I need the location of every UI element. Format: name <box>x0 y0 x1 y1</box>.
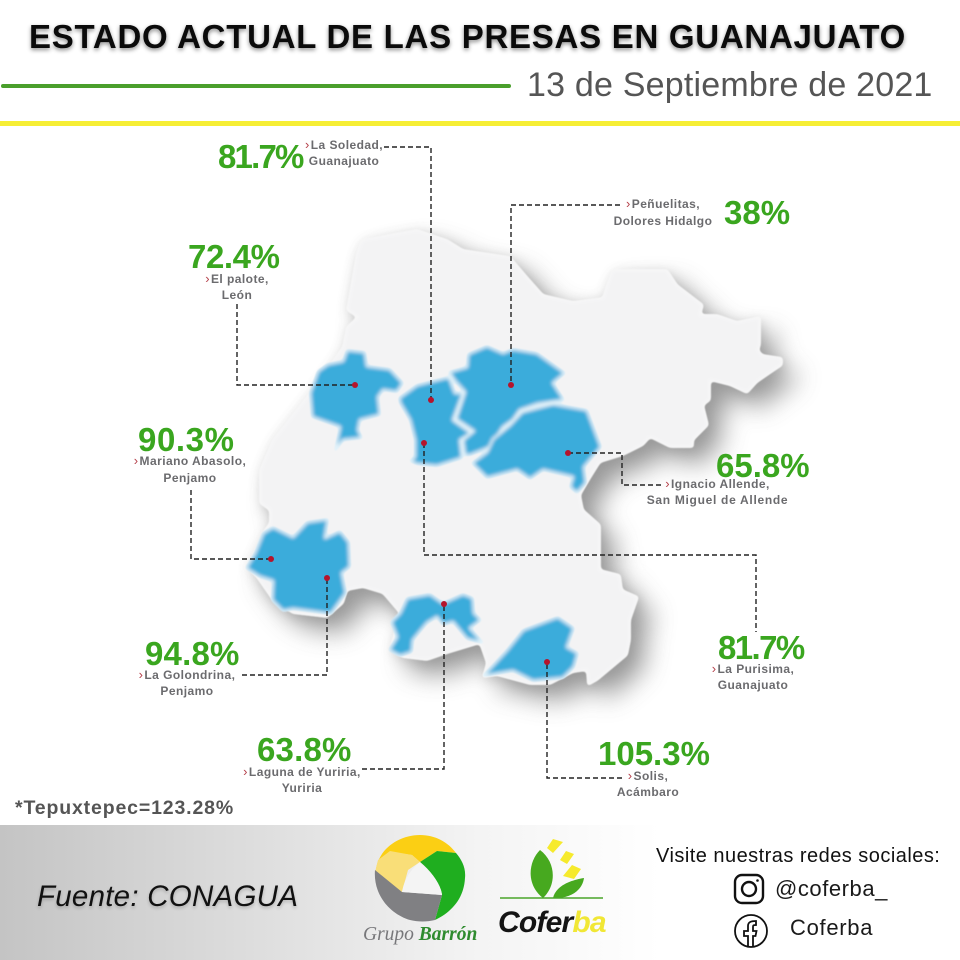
leaf tall <box>531 850 553 898</box>
label: La Purísima: Guanajuato <box>718 678 788 692</box>
label: Ignacio Allende: San Miguel de Allende <box>647 492 788 506</box>
municipalities <box>246 346 601 681</box>
wordmark: Coferba <box>498 906 606 939</box>
instagram handle: @coferba_ <box>775 876 888 901</box>
date subtitle: 13 de Septiembre de 2021 <box>527 66 933 104</box>
stat: Laguna de Yuriria: 63.8% <box>257 731 352 768</box>
label: Ignacio Allende <box>647 476 788 506</box>
note: Tepuxtepec: *Tepuxtepec=123.28% <box>15 797 234 819</box>
ground line <box>500 897 603 899</box>
region: Guanajuato <box>399 377 471 466</box>
label: Mariano Abasolo: Penjamo <box>163 471 217 485</box>
label: El palote: ›El palote, <box>205 271 269 286</box>
label: Peñuelitas <box>614 196 712 228</box>
label: La Purísima <box>712 661 794 692</box>
dam markers <box>268 382 571 665</box>
region: León <box>310 350 403 451</box>
label: La Golondrina <box>139 667 235 698</box>
label: La Purísima: ›La Purisima, <box>712 661 794 676</box>
stat: La Soledad: 81.7% <box>218 138 303 175</box>
logo: Coferba <box>498 839 606 939</box>
facebook name: Coferba <box>790 915 873 940</box>
yellow rule <box>0 121 960 126</box>
label: El palote <box>205 271 269 302</box>
region: Penjamo <box>246 519 350 614</box>
icon: facebook <box>734 914 768 948</box>
label: La Soledad: ›La Soledad, <box>305 137 383 152</box>
label: La Soledad: Guanajuato <box>309 154 379 168</box>
logo: Grupo Barrón <box>363 835 477 945</box>
label: Mariano Abasolo: ›Mariano Abasolo, <box>134 453 246 468</box>
stat: Solís: 105.3% <box>598 735 710 772</box>
stat: Ignacio Allende: 65.8% <box>716 447 810 484</box>
stat: La Golondrina: 94.8% <box>145 635 240 672</box>
label: Peñuelitas: Dolores Hidalgo <box>614 214 712 228</box>
region: Acámbaro <box>483 617 578 681</box>
stat: Mariano Abasolo: 90.3% <box>138 421 235 458</box>
label: Mariano Abasolo <box>134 453 246 485</box>
label: Ignacio Allende: ›Ignacio Allende, <box>665 476 770 491</box>
logo wordmark: Grupo Barrón <box>363 924 477 945</box>
leaf small <box>553 878 584 898</box>
region: Dolores Hidalgo <box>449 346 565 455</box>
label: Laguna de Yuriria: ›Laguna de Yuriria, <box>243 764 361 779</box>
footer band <box>0 825 960 960</box>
label: Peñuelitas: ›Peñuelitas, <box>626 196 700 211</box>
region: Yuriria <box>389 594 483 656</box>
label: La Soledad <box>305 137 383 168</box>
region: San Miguel de Allende <box>472 404 601 493</box>
stat: La Purísima: 81.7% <box>718 629 804 666</box>
label: La Golondrina: ›La Golondrina, <box>139 667 235 682</box>
label: Solís: Acámbaro <box>617 784 679 798</box>
sun rays <box>547 839 581 879</box>
label: Laguna de Yuriria: Yuriria <box>282 780 322 794</box>
stat: Peñuelitas: 38% <box>724 194 790 231</box>
social heading: Visite nuestras redes sociales: <box>656 845 940 867</box>
title: ESTADO ACTUAL DE LAS PRESAS EN GUANAJUATO <box>29 18 906 55</box>
source: Fuente: CONAGUA <box>37 880 298 913</box>
label: El palote: León <box>222 288 252 302</box>
logo ring <box>375 835 465 922</box>
green rule <box>1 84 511 88</box>
state silhouette <box>247 230 782 685</box>
label: Laguna de Yuriria <box>243 764 361 794</box>
label: Solís: ›Solis, <box>628 768 668 783</box>
map shadow <box>249 233 797 700</box>
label: La Golondrina: Penjamo <box>160 684 214 698</box>
label: Solís <box>617 768 679 798</box>
icon: instagram <box>734 874 764 904</box>
stat: El palote: 72.4% <box>188 238 280 275</box>
leader lines <box>191 147 756 778</box>
